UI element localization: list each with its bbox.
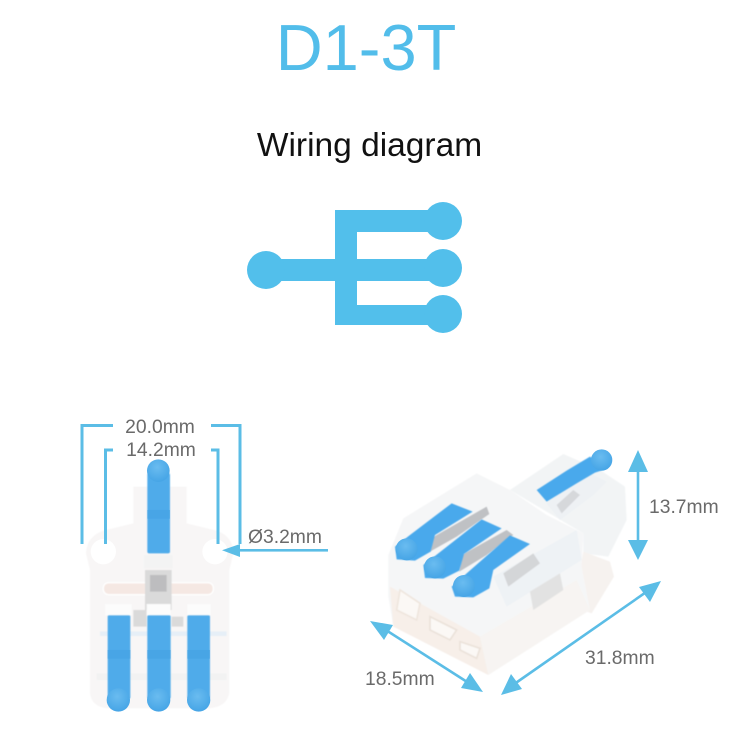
heading: wiring diagram: Wiring diagram <box>257 127 482 164</box>
title: D1-3T <box>276 11 456 84</box>
label: 13.7mm: 13.7mm <box>649 497 719 518</box>
blue levers <box>108 473 210 699</box>
label: 18.5mm: 18.5mm <box>365 669 435 690</box>
connector top view photo <box>86 459 233 712</box>
grey clips <box>430 507 513 572</box>
label: 14.2mm: 14.2mm <box>126 440 196 461</box>
dimension arrows <box>378 458 652 687</box>
label: hole diameter: Ø3.2mm <box>248 527 322 548</box>
connector perspective photo <box>388 449 627 675</box>
arrowheads <box>370 450 661 695</box>
arrow: hole diameter <box>222 544 328 557</box>
label: 20.0mm: 20.0mm <box>125 417 195 438</box>
label: 31.8mm: 31.8mm <box>585 648 655 669</box>
dimension brackets <box>82 426 240 544</box>
mounting holes <box>91 539 228 564</box>
wiring diagram icon <box>247 202 462 333</box>
blue levers <box>395 457 608 597</box>
